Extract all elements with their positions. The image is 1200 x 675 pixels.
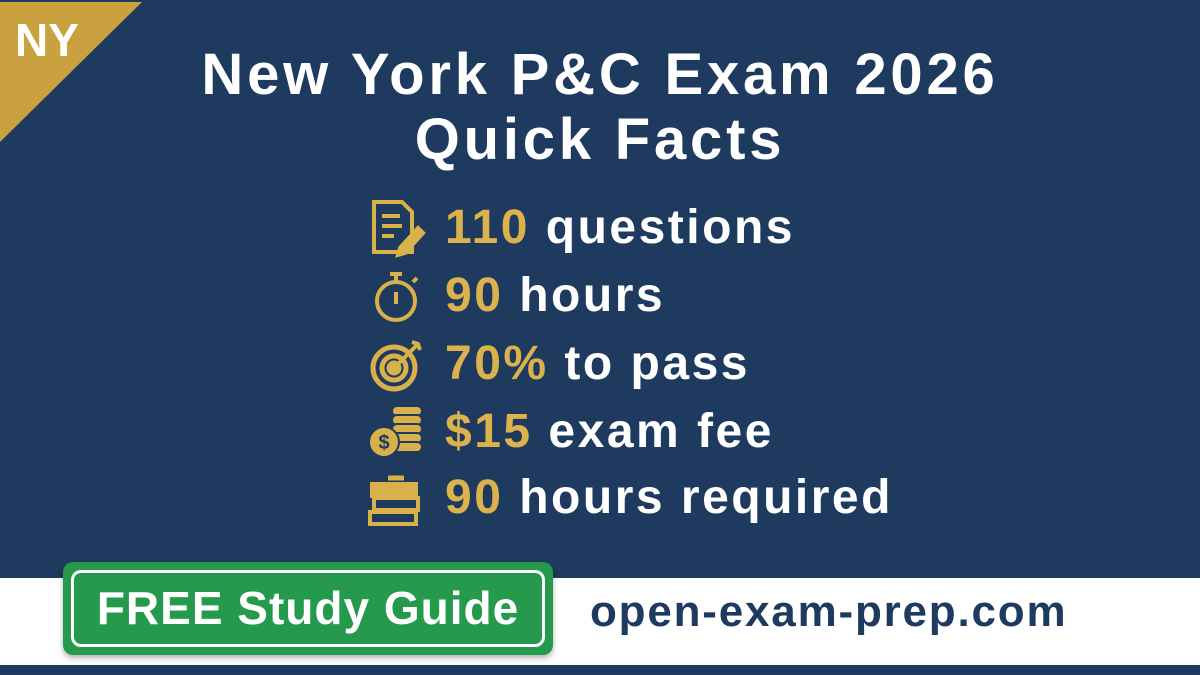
gold corner badge: NY [15,14,79,66]
icon: target [370,340,422,392]
icon: document [372,200,426,258]
icon: coins [370,407,421,456]
icon: stopwatch [375,272,418,322]
green badge: FREE Study Guide [97,582,519,634]
icon: books [368,476,420,526]
icon: coins: $ [378,432,390,454]
fact: required hours: 90 hours required [445,471,893,524]
gold corner badge [0,2,142,142]
green badge [63,562,553,655]
fact: pass: 70% to pass [445,337,750,390]
website url: open-exam-prep.com [590,587,1067,636]
fact: hours: 90 hours [445,269,665,322]
white footer band [0,578,1200,665]
title: Quick Facts [415,107,785,172]
fact: questions: 110 questions [445,201,795,254]
title [201,42,999,172]
title: New York P&C Exam 2026 [201,42,999,107]
fact: fee: $15 exam fee [445,405,774,458]
